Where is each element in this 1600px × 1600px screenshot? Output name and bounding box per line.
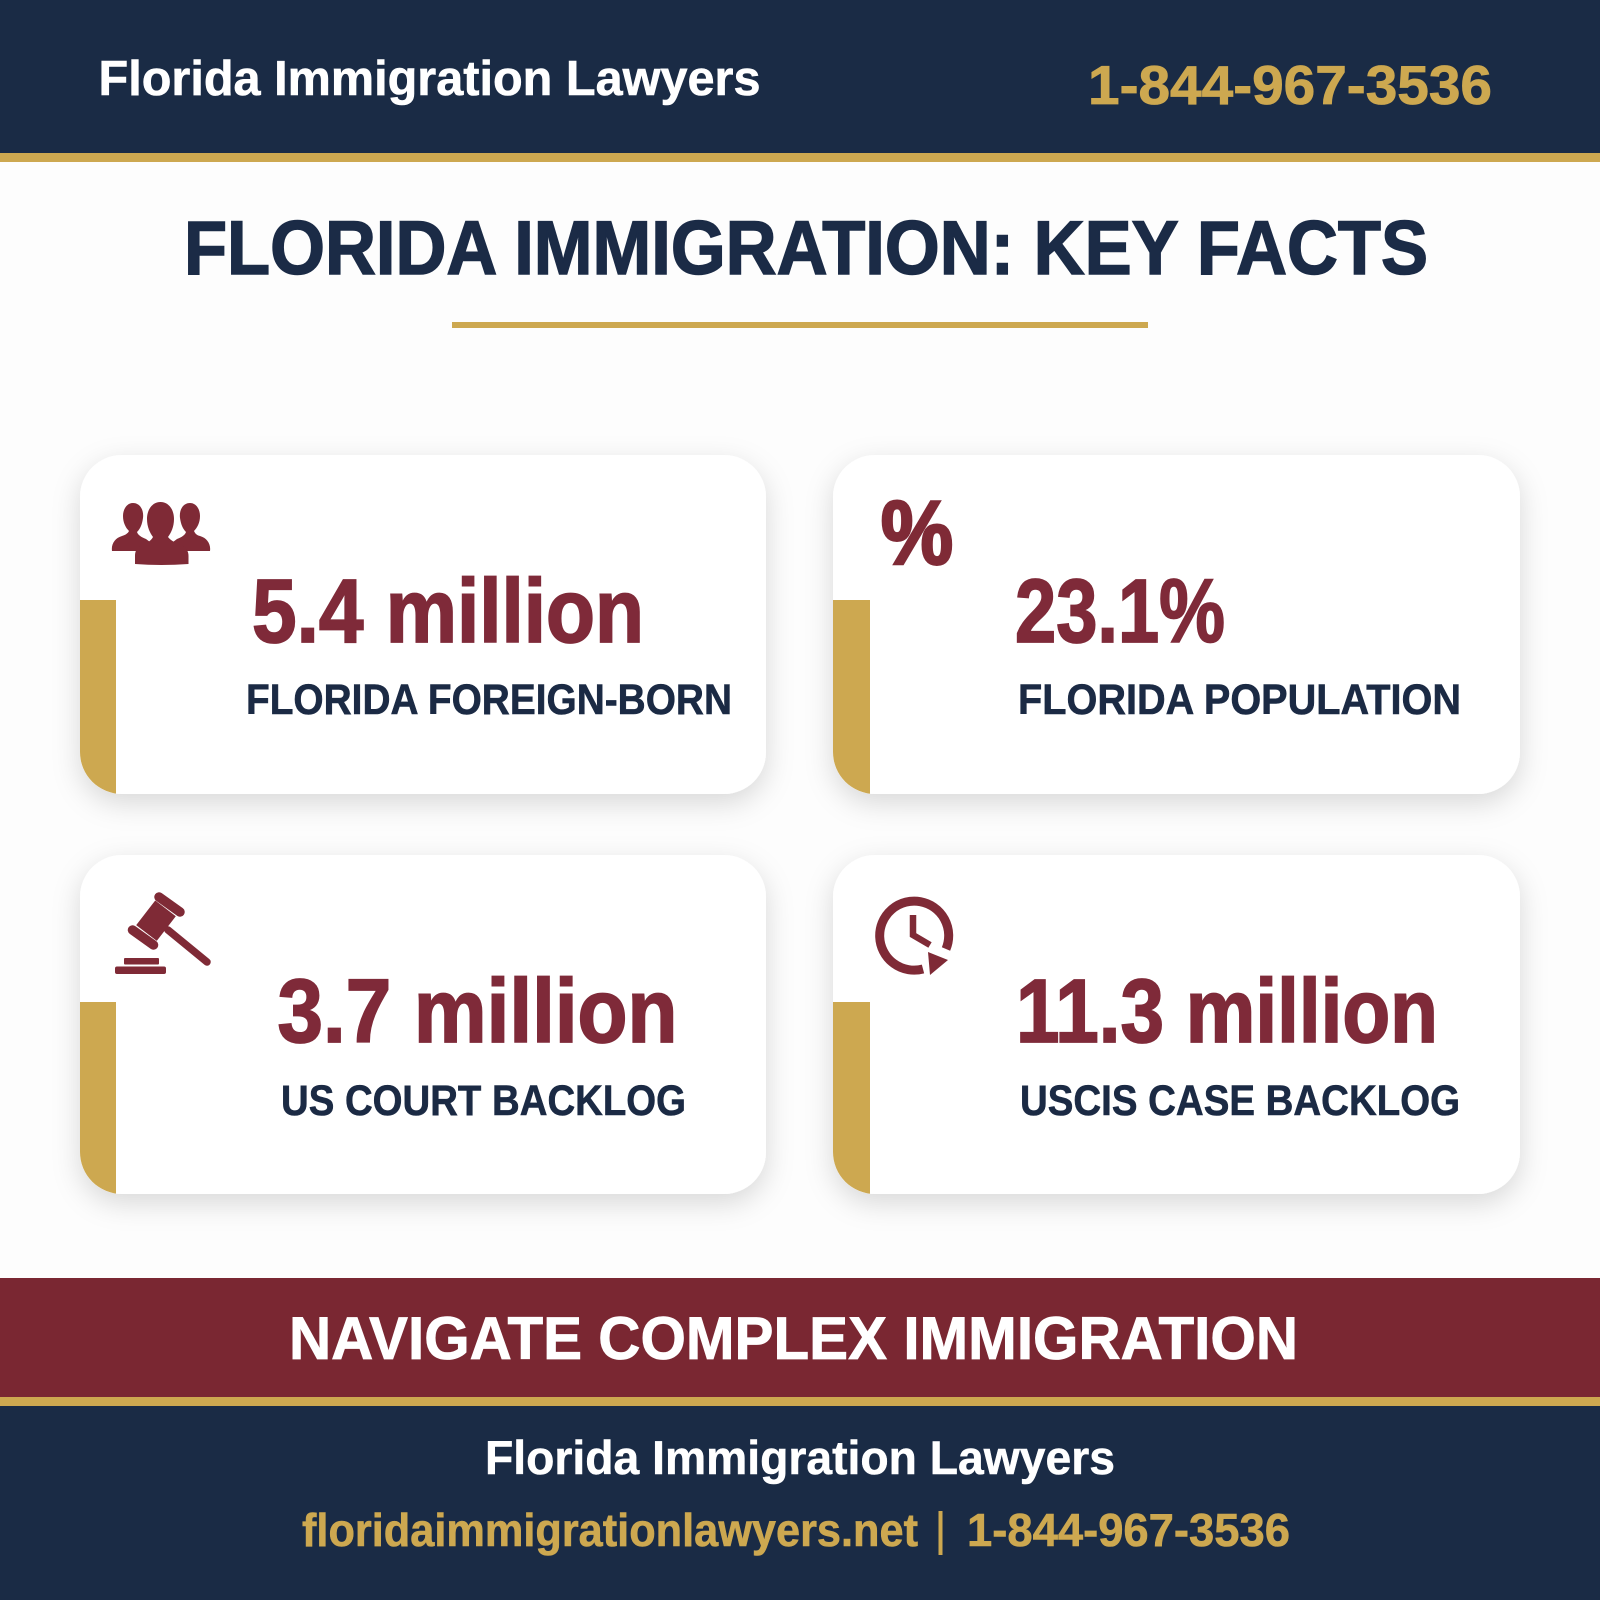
stat label: USCIS CASE BACKLOG (1020, 1077, 1460, 1125)
header firm name: Florida Immigration Lawyers (98, 52, 760, 106)
stat value: 11.3 million (1016, 962, 1438, 1062)
gold divider (0, 1397, 1600, 1406)
title: FLORIDA IMMIGRATION: KEY FACTS (184, 206, 1428, 291)
stat value: 5.4 million (252, 562, 644, 662)
footer separator (938, 1511, 942, 1555)
panel: US court backlog (80, 855, 766, 1194)
icon: gavel (115, 897, 207, 974)
call-to-action banner (0, 1278, 1600, 1397)
banner text: NAVIGATE COMPLEX IMMIGRATION (289, 1305, 1298, 1372)
icon: people (112, 502, 210, 565)
stat label: US COURT BACKLOG (281, 1077, 686, 1125)
footer firm name: Florida Immigration Lawyers (485, 1431, 1115, 1484)
header phone number: 1-844-967-3536 (1088, 54, 1492, 116)
panel: Florida foreign-born (80, 455, 766, 794)
header bar (0, 0, 1600, 162)
panel: Florida population (833, 455, 1520, 794)
footer phone number: 1-844-967-3536 (967, 1504, 1290, 1556)
footer website: floridaimmigrationlawyers.net (302, 1504, 918, 1556)
stat label: FLORIDA POPULATION (1018, 676, 1461, 724)
icon: clock (880, 901, 949, 975)
title underline (452, 322, 1148, 328)
stat value: 23.1% (1015, 562, 1225, 662)
panel: USCIS case backlog (833, 855, 1520, 1194)
footer (0, 1406, 1600, 1600)
icon: percent: % (881, 484, 953, 584)
stat value: 3.7 million (278, 962, 678, 1062)
stat label: FLORIDA FOREIGN-BORN (246, 676, 732, 724)
